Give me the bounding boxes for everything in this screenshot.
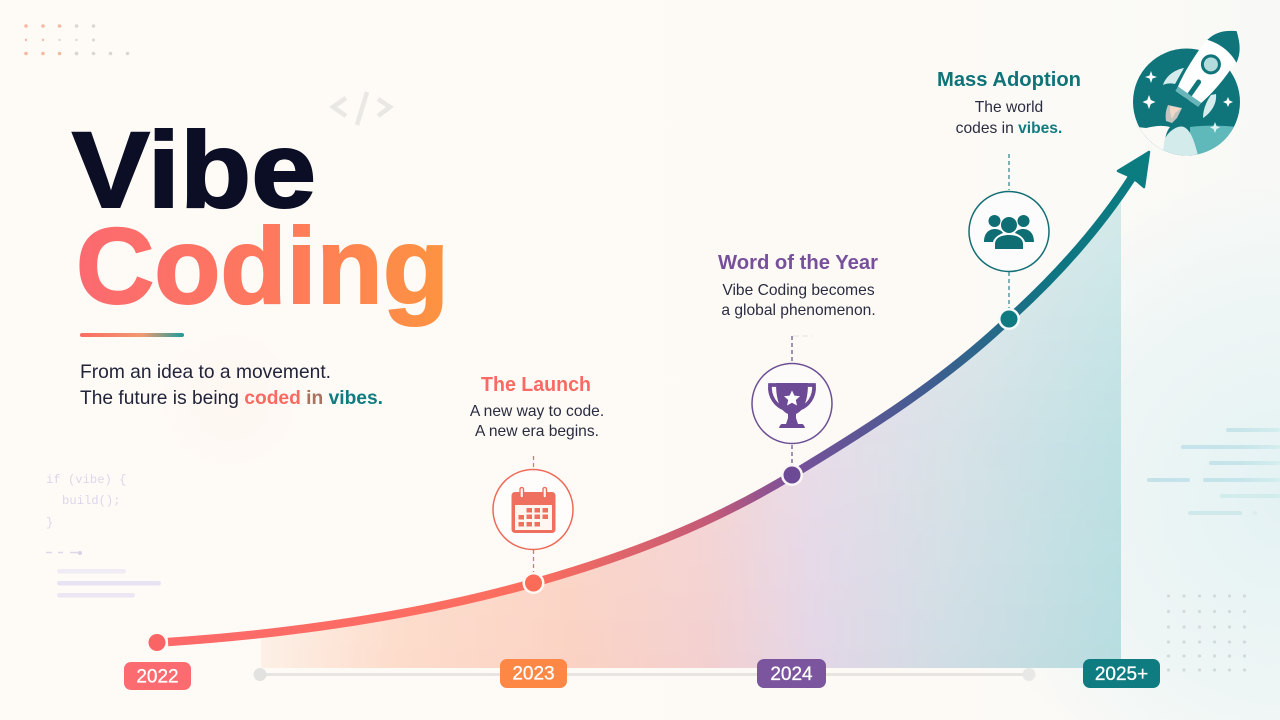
decorative speed lines: right: [1147, 428, 1280, 515]
description: Mass Adoption: The world: [975, 99, 1043, 116]
subtitle text: [80, 361, 383, 409]
heading: Word of the Year: Word of the Year: [718, 251, 878, 274]
icon: trophy: [770, 383, 814, 428]
area under growth curve: [261, 202, 1121, 668]
decorative code tag icon: [333, 92, 390, 125]
subtitle text: The future is being coded in vibes.: [80, 387, 383, 409]
decorative dot grid: top left: [24, 24, 129, 55]
subtitle text: From an idea to a movement.: [80, 361, 331, 383]
description: Word of the Year: a global phenomenon.: [721, 302, 876, 319]
description: Mass Adoption: codes in vibes.: [956, 120, 1062, 137]
timeline axis: [254, 668, 1036, 681]
decorative code snippet: }: [46, 516, 53, 530]
milestone: Word of the Year 2024: 2024: [770, 664, 813, 685]
milestone: start 2022: 2022: [136, 666, 179, 688]
title: Coding: [76, 205, 449, 326]
milestone: The Launch 2023: [470, 373, 604, 688]
heading: Mass Adoption: Mass Adoption: [937, 68, 1081, 91]
milestone: The Launch 2023: 2023: [512, 664, 555, 684]
decorative dot grid: bottom right: [1167, 594, 1246, 672]
growth curve arrow: [168, 152, 1149, 642]
decorative code snippet: build();: [62, 494, 121, 508]
title underline: [80, 333, 184, 337]
milestone: start 2022: [124, 632, 191, 690]
decorative code snippet: [46, 473, 161, 598]
description: Word of the Year: Vibe Coding becomes: [722, 282, 875, 299]
heading: The Launch: The Launch: [481, 373, 591, 396]
description: Mass Adoption: [956, 99, 1062, 137]
milestone: Mass Adoption 2025+: 2025+: [1095, 664, 1148, 685]
title: Vibe: [72, 109, 316, 230]
icon: rocket badge: [1133, 30, 1240, 156]
icon: calendar: [512, 488, 556, 533]
decorative code snippet: if (vibe) {: [46, 473, 126, 487]
description: Word of the Year: [721, 282, 876, 319]
milestone: Word of the Year 2024: [718, 251, 878, 688]
milestone: Mass Adoption 2025+: [937, 68, 1160, 688]
title: [72, 109, 449, 326]
description: The Launch: [470, 403, 604, 440]
description: The Launch: A new way to code.: [470, 403, 604, 420]
icon: people: [984, 215, 1034, 249]
description: The Launch: A new era begins.: [475, 423, 599, 440]
